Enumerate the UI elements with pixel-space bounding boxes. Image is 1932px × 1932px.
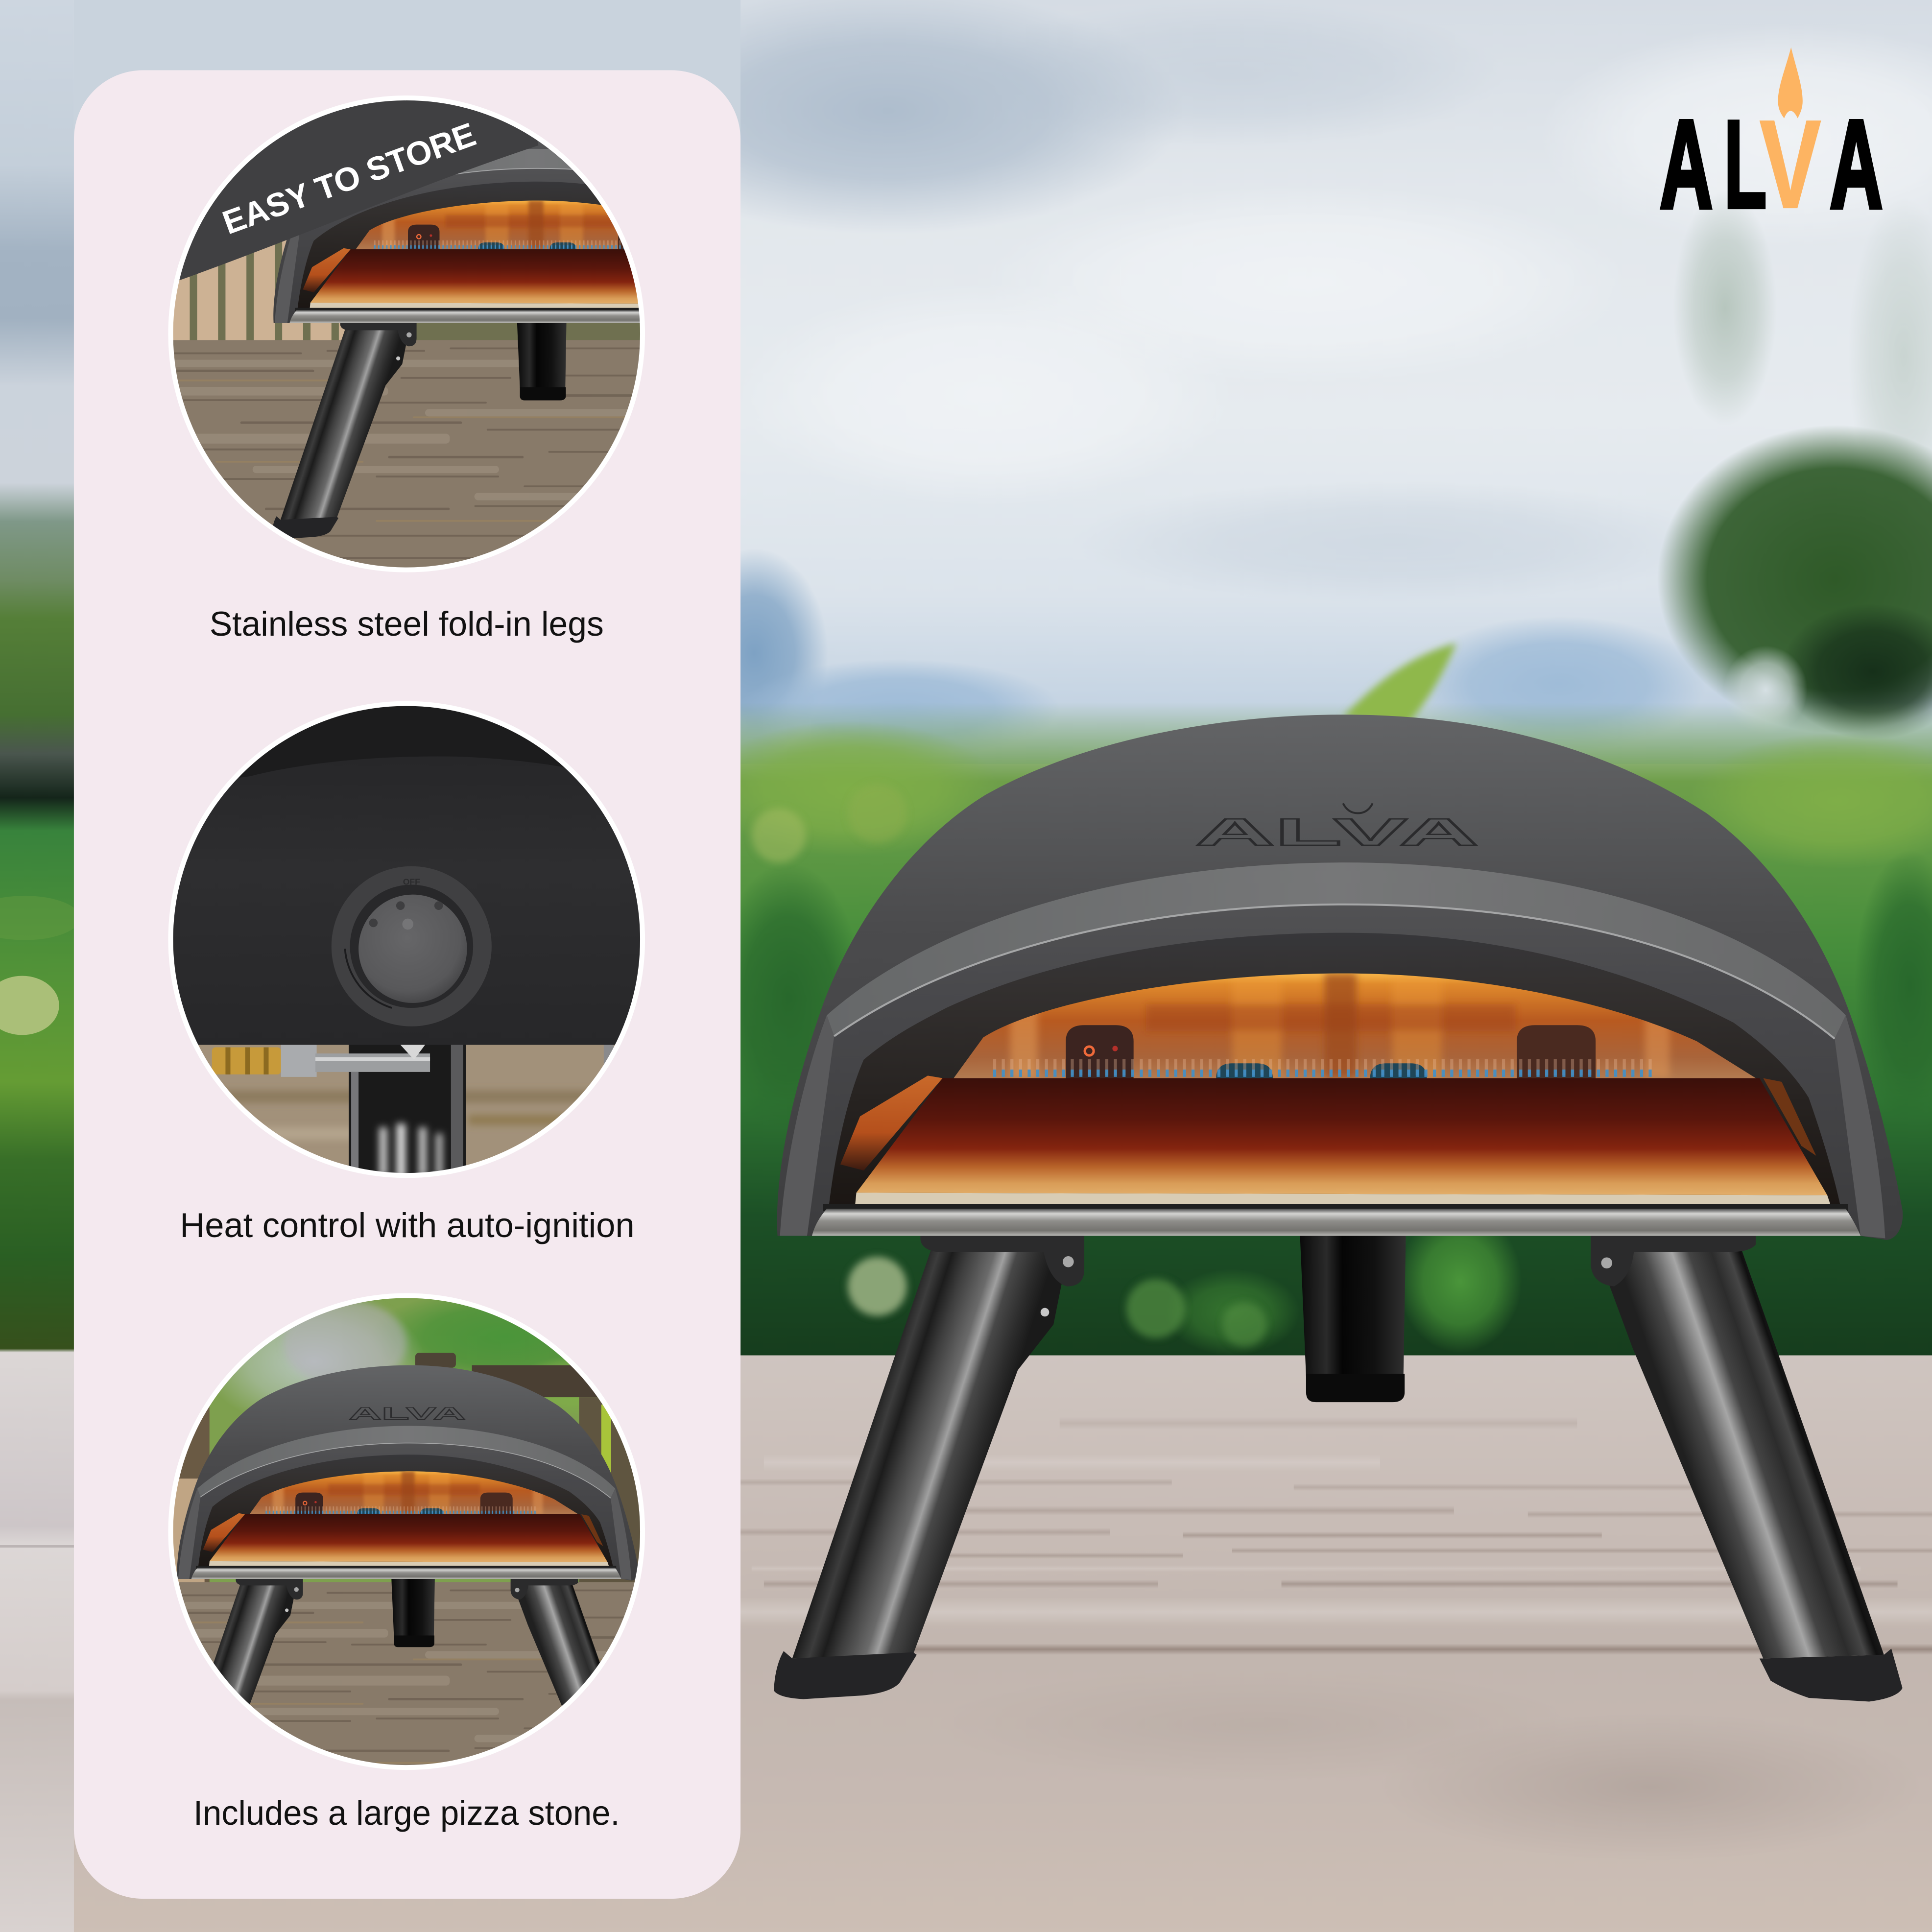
caption: fold-in legs: Stainless steel fold-in legs: [210, 604, 604, 643]
control knob: [332, 866, 492, 1026]
caption: pizza stone: Includes a large pizza stone.: [193, 1793, 620, 1832]
logo: ALVA with flame: A: [1830, 95, 1883, 235]
feature circle: heat control knob: [160, 690, 659, 1189]
product: main pizza oven: [774, 715, 1903, 1702]
embossed oven logo: [1195, 803, 1479, 854]
banner: easy to store: [179, 100, 539, 280]
top background margin behind panel corners: [74, 0, 740, 148]
control knob: OFF: [403, 877, 420, 886]
icon: flame: [1778, 48, 1803, 119]
logo: ALVA with flame: A: [1660, 95, 1713, 235]
embossed logo on small oven: ALVA: [349, 1404, 466, 1423]
gas inlet fitting: [212, 1045, 430, 1077]
feature circle: oven with pizza stone: [167, 1288, 659, 1829]
table grain streaks: [740, 1417, 1932, 1655]
logo: ALVA with flame: [1660, 48, 1883, 235]
banner: easy to store: EASY TO STORE: [218, 116, 480, 241]
logo: ALVA with flame: V: [1760, 95, 1821, 235]
feature circle: fold-in legs with easy to store banner: [160, 74, 798, 587]
left strip of background: [0, 0, 74, 1932]
embossed oven logo: ALVA: [1195, 811, 1479, 854]
caption: heat control: Heat control with auto-ignition: [180, 1206, 635, 1244]
panel: feature list: [74, 70, 798, 1899]
logo: ALVA with flame: L: [1724, 95, 1767, 235]
